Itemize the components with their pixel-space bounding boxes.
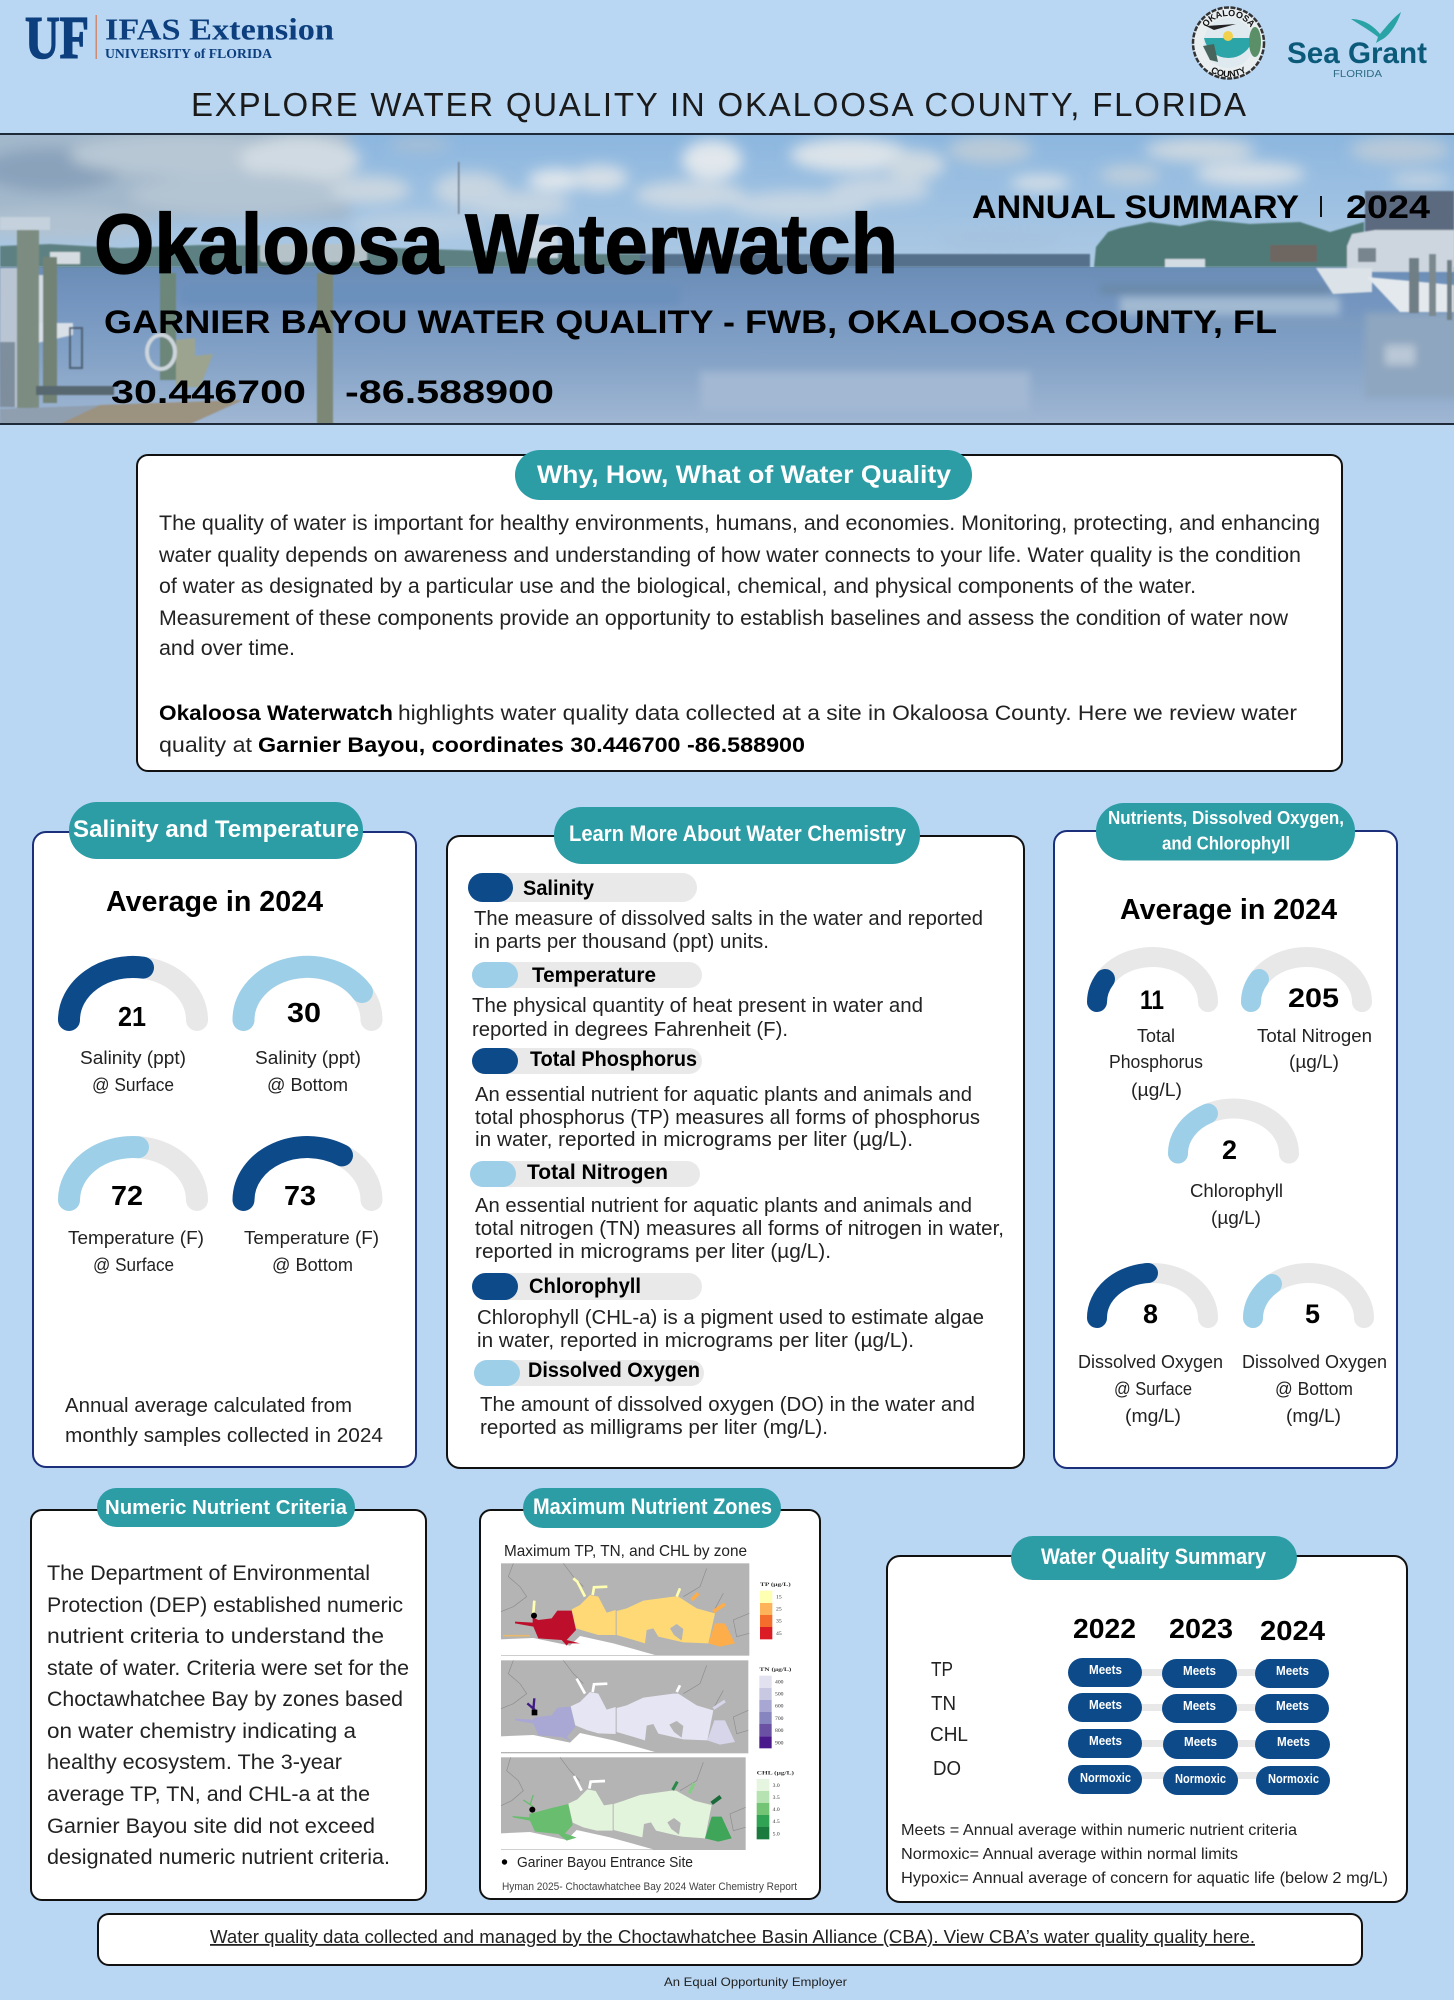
legend: total phosphorus: 15 [776,1595,782,1601]
criteria paragraph: Choctawhatchee Bay by zones based [47,1688,403,1711]
logo: Sea Grant Florida: FLORIDA [1333,69,1382,80]
criteria paragraph: state of water. Criteria were set for the [47,1657,409,1680]
banner photo of the bayou [0,125,1454,424]
gauge: dissolved oxygen bottom: @ Bottom [1275,1379,1353,1399]
annual summary label: 2024 [1346,189,1430,225]
gauge: salinity bottom: 30 [287,997,321,1028]
criteria paragraph: healthy ecosystem. The 3-year [47,1751,342,1774]
term: dissolved oxygen [474,1359,975,1439]
intro paragraph [158,512,1320,660]
gauge: total nitrogen: (µg/L) [1289,1052,1339,1072]
site paragraph: quality at [159,734,252,757]
heading pill: Maximum Nutrient Zones [533,1494,772,1519]
legend: total nitrogen [759,1666,791,1748]
row labels: TN [931,1693,956,1715]
gauge: temperature surface: @ Surface [93,1255,174,1275]
gauge: chlorophyll: (µg/L) [1211,1208,1261,1228]
heading pill: Numeric Nutrient Criteria [105,1497,348,1519]
heading pill [554,807,920,864]
legend: chlorophyll: 4.0 [773,1807,780,1813]
intro paragraph: and over time. [159,637,295,660]
data credit link bar: Water quality data collected and managed by the Choctawhatchee Basin Alliance (CBA). View CBA’s water quality quality here. [210,1927,1255,1947]
legend: total nitrogen: 800 [775,1728,784,1734]
gauge: total phosphorus: 11 [1140,985,1164,1015]
status pills: 2022 [1068,1658,1142,1794]
term: chlorophyll [472,1273,984,1352]
panel: why, how, what of water quality [137,450,1342,771]
gauge: dissolved oxygen surface: (mg/L) [1125,1406,1181,1426]
legend: total nitrogen: 700 [775,1716,784,1722]
term: salinity: Salinity [523,877,594,900]
term: dissolved oxygen: Dissolved Oxygen [528,1359,700,1382]
map: total phosphorus [501,1563,749,1656]
term: total nitrogen [470,1161,1004,1263]
term: temperature: Temperature [532,964,656,987]
status labels: Normoxic [1175,1772,1226,1786]
footer note: An Equal Opportunity Employer [664,1975,847,1989]
status labels: Meets [1089,1734,1122,1748]
gauge: total phosphorus: Total [1137,1026,1175,1046]
panel: water quality summary [887,1536,1407,1902]
status legend: Meets = Annual average within numeric nutrient criteria [901,1822,1297,1839]
gauge: dissolved oxygen surface: Dissolved Oxygen [1078,1352,1223,1372]
legend: total phosphorus: TP (µg/L) [760,1581,791,1588]
legend: chlorophyll: 4.5 [773,1819,780,1825]
status legend: Normoxic= Annual average within normal limits [901,1846,1238,1863]
term: salinity: The measure of dissolved salts in the water and reported [474,908,983,930]
intro paragraph: water quality depends on awareness and understanding of how water connects to your life. Water quality is the condition [158,544,1301,567]
term: chlorophyll: Chlorophyll (CHL-a) is a pigment used to estimate algae [477,1307,984,1329]
row labels: TP [931,1659,953,1681]
page heading: EXPLORE WATER QUALITY IN OKALOOSA COUNTY, FLORIDA [191,86,1246,123]
site paragraph: Garnier Bayou, coordinates 30.446700 -86.588900 [258,734,805,757]
gauge: chlorophyll: 2 [1222,1135,1237,1165]
criteria paragraph: designated numeric nutrient criteria. [47,1846,390,1869]
site paragraph: highlights water quality data collected at a site in Okaloosa County. Here we review water [398,702,1297,725]
logo: Sea Grant Florida [1287,12,1427,80]
logo: UF IFAS Extension: UNIVERSITY of FLORIDA [105,46,272,61]
term: salinity: in parts per thousand (ppt) units. [474,931,769,953]
term: total nitrogen: An essential nutrient for aquatic plants and animals and [475,1195,972,1217]
legend: chlorophyll: 5.0 [773,1831,780,1837]
term: temperature: The physical quantity of heat present in water and [472,995,923,1017]
legend: chlorophyll: CHL (µg/L) [757,1769,794,1776]
criteria paragraph: on water chemistry indicating a [47,1720,356,1743]
status legend [901,1822,1388,1887]
gauge: dissolved oxygen bottom: (mg/L) [1286,1406,1341,1426]
site paragraph: Okaloosa Waterwatch [159,702,393,725]
data credit link bar [98,1914,1362,1965]
gauge: total nitrogen [1251,957,1372,1072]
gauge: temperature bottom [244,1147,379,1275]
row labels: DO [933,1758,961,1780]
criteria paragraph: nutrient criteria to understand the [47,1625,384,1648]
gauge: salinity surface: @ Surface [92,1075,174,1095]
intro paragraph: The quality of water is important for healthy environments, humans, and economies. Monitoring, protecting, and enhancing [159,512,1320,535]
heading pill [523,1488,781,1528]
status labels: Meets [1183,1664,1216,1678]
criteria paragraph: Protection (DEP) established numeric [47,1594,403,1617]
gauge: temperature surface: 72 [111,1180,143,1211]
term: total phosphorus: total phosphorus (TP) measures all forms of phosphorus [475,1107,980,1129]
map source: Hyman 2025- Choctawhatchee Bay 2024 Water Chemistry Report [502,1881,797,1893]
gauge: temperature bottom: 73 [284,1180,316,1211]
site coordinates: -86.588900 [345,374,554,410]
heading pill [1011,1536,1297,1580]
status legend: Hypoxic= Annual average of concern for aquatic life (below 2 mg/L) [901,1870,1388,1887]
gauge: total phosphorus: (µg/L) [1131,1080,1182,1100]
gauge: total phosphorus: Phosphorus [1109,1052,1203,1072]
term: total phosphorus: An essential nutrient for aquatic plants and animals and [475,1084,972,1106]
year headers: 2024 [1260,1615,1325,1646]
legend: total phosphorus: 25 [776,1607,782,1613]
panel: nutrients, dissolved oxygen, and chlorophyll [1054,803,1397,1468]
heading pill: Salinity and Temperature [73,816,359,843]
logo: UF IFAS Extension [25,5,334,71]
banner title: Okaloosa Waterwatch [94,197,898,291]
logo: Okaloosa County seal [1192,6,1266,80]
panel: learn more about water chemistry [447,807,1024,1468]
legend: total nitrogen: 400 [775,1680,784,1686]
gauge: salinity bottom: @ Bottom [267,1075,348,1095]
criteria paragraph: The Department of Environmental [47,1562,370,1585]
term: chlorophyll: in water, reported in micrograms per liter (µg/L). [477,1330,914,1352]
legend: total nitrogen: 600 [775,1704,784,1710]
term: total nitrogen: reported in micrograms per liter (µg/L). [475,1241,831,1263]
status labels: Meets [1276,1664,1309,1678]
gauge: temperature surface: Temperature (F) [68,1228,204,1248]
subheading: Average in 2024 [1120,894,1337,926]
annual summary label [972,189,1430,225]
gauge: salinity surface [69,967,197,1095]
gauge: dissolved oxygen bottom: Dissolved Oxygen [1242,1352,1387,1372]
site paragraph [159,702,1297,757]
site coordinates [111,374,554,410]
gauge: total nitrogen: 205 [1288,983,1339,1013]
term: salinity [468,873,983,953]
legend: total nitrogen: 500 [775,1692,784,1698]
legend: total phosphorus: 35 [776,1619,782,1625]
term: temperature: reported in degrees Fahrenheit (F). [472,1019,788,1041]
gauge: chlorophyll: Chlorophyll [1190,1181,1283,1201]
legend: chlorophyll: 3.5 [773,1795,780,1801]
logo: Okaloosa County seal: COUNTY [1212,66,1244,77]
year headers: 2023 [1169,1613,1233,1644]
term: dissolved oxygen: The amount of dissolved oxygen (DO) in the water and [480,1394,975,1416]
heading pill: Water Quality Summary [1041,1544,1267,1569]
legend: total phosphorus [760,1581,791,1639]
row labels: CHL [930,1724,968,1746]
heading pill: Learn More About Water Chemistry [569,821,907,846]
status labels [1080,1663,1319,1786]
site subtitle: GARNIER BAYOU WATER QUALITY - FWB, OKALOOSA COUNTY, FL [104,304,1277,340]
status connectors [1140,1669,1258,1779]
map: total nitrogen [501,1660,748,1753]
map caption: Maximum TP, TN, and CHL by zone [504,1543,747,1560]
gauge: total nitrogen: Total Nitrogen [1257,1026,1372,1046]
gauge: salinity surface: Salinity (ppt) [80,1048,186,1068]
heading pill [515,450,972,500]
term: chlorophyll: Chlorophyll [529,1275,641,1298]
term: total nitrogen: Total Nitrogen [527,1161,668,1184]
term: total phosphorus [472,1048,980,1151]
status labels: Meets [1183,1699,1216,1713]
gauge: chlorophyll [1178,1108,1289,1228]
legend: chlorophyll [757,1769,794,1839]
panel: maximum nutrient zones [480,1488,820,1899]
intro paragraph: of water as designated by a particular use and the biological, chemical, and physical components of the water. [159,575,1196,598]
logo: UF IFAS Extension: UF [25,5,89,71]
annual average note [65,1395,383,1447]
year headers: 2022 [1073,1613,1136,1644]
gauge: salinity surface: 21 [118,1001,146,1032]
annual summary label: ANNUAL SUMMARY [972,189,1299,225]
term: total phosphorus: in water, reported in micrograms per liter (µg/L). [475,1129,913,1151]
map: chlorophyll [501,1757,746,1850]
legend: total nitrogen: TN (µg/L) [759,1666,791,1673]
status labels: Meets [1089,1698,1122,1712]
heading pill: Why, How, What of Water Quality [537,461,951,489]
gauge: temperature surface [68,1147,204,1275]
gauge: dissolved oxygen bottom [1242,1273,1387,1426]
subheading: Average in 2024 [106,886,323,918]
heading pill [97,1488,355,1527]
logo: UF IFAS Extension: IFAS Extension [105,12,334,46]
status labels: Meets [1276,1699,1309,1713]
gauge: total phosphorus [1097,957,1208,1100]
row labels [930,1659,968,1780]
gauge: dissolved oxygen surface: @ Surface [1114,1379,1192,1399]
term: dissolved oxygen: reported as milligrams per liter (mg/L). [480,1417,828,1439]
term: total phosphorus: Total Phosphorus [530,1048,697,1071]
site key: Gariner Bayou Entrance Site [517,1854,693,1871]
gauge: temperature bottom: Temperature (F) [244,1228,379,1248]
status labels: Normoxic [1080,1771,1131,1785]
status labels: Normoxic [1268,1772,1319,1786]
annual average note: monthly samples collected in 2024 [65,1425,383,1447]
criteria paragraph: average TP, TN, and CHL-a at the [47,1783,370,1806]
heading pill: Nutrients, Dissolved Oxygen, [1108,808,1344,828]
criteria paragraph [47,1562,409,1869]
heading pill: and Chlorophyll [1162,834,1290,854]
gauge: temperature bottom: @ Bottom [272,1255,353,1275]
gauge: salinity bottom: Salinity (ppt) [255,1048,361,1068]
intro paragraph: Measurement of these components provide an opportunity to establish baselines and assess the condition of water now [159,607,1289,630]
heading pill [1096,803,1355,860]
site coordinates: 30.446700 [111,374,306,410]
gauge: dissolved oxygen surface [1078,1273,1223,1426]
status labels: Meets [1184,1735,1217,1749]
year headers [1073,1613,1325,1646]
gauge: dissolved oxygen bottom: 5 [1305,1299,1320,1329]
annual average note: Annual average calculated from [65,1395,352,1417]
criteria paragraph: Garnier Bayou site did not exceed [47,1815,375,1838]
status pills: 2024 [1255,1659,1330,1795]
legend: total phosphorus: 45 [776,1631,782,1637]
status pills: 2023 [1162,1659,1238,1795]
term: total nitrogen: total nitrogen (TN) measures all forms of nitrogen in water, [475,1218,1004,1240]
logo: Okaloosa County seal: OKALOOSA [1202,10,1254,28]
term: temperature [472,962,923,1041]
heading pill [69,802,363,859]
banner top and bottom rules [0,133,1454,425]
gauge: dissolved oxygen surface: 8 [1143,1299,1158,1329]
logo: Sea Grant Florida: Sea Grant [1287,37,1427,70]
gauge: salinity bottom [243,967,372,1095]
status labels: Meets [1089,1663,1122,1677]
status labels: Meets [1277,1735,1310,1749]
panel: numeric nutrient criteria [31,1488,426,1900]
legend: total nitrogen: 900 [775,1740,784,1746]
panel: salinity and temperature [33,802,416,1467]
legend: chlorophyll: 3.0 [773,1783,780,1789]
